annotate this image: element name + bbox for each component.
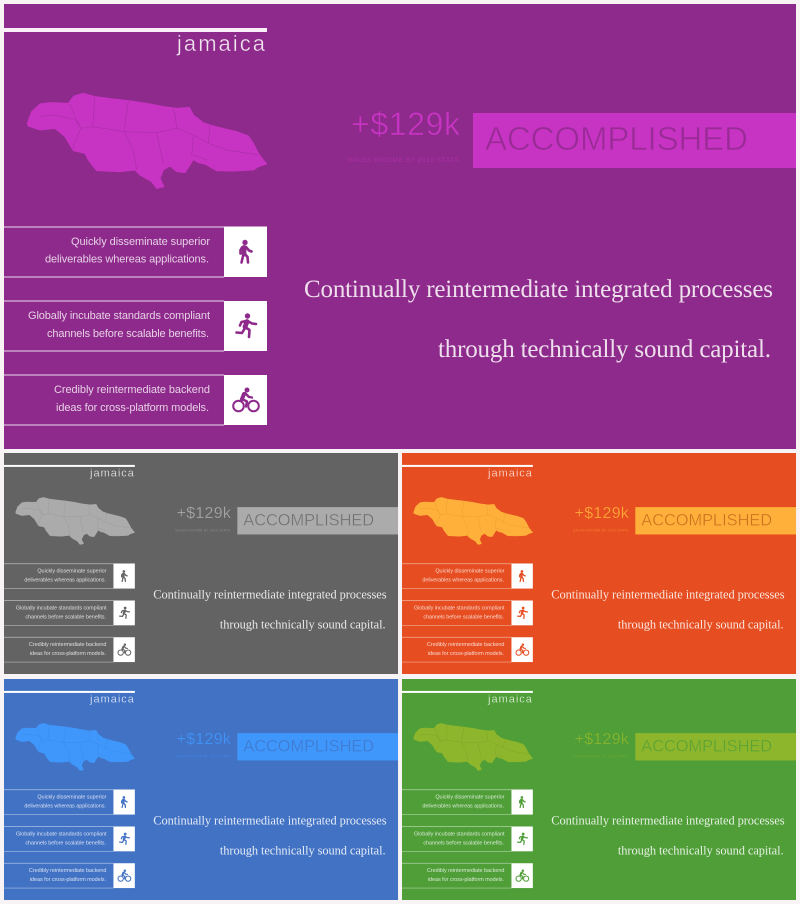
banner: accomplished: ACCOMPLISHED bbox=[641, 512, 772, 529]
row: running bbox=[4, 826, 135, 851]
stat: income: +$129k bbox=[575, 731, 629, 748]
statement text: Continually reintermediate integrated processes bbox=[551, 588, 785, 602]
row: cycling: Credibly reintermediate backend bbox=[29, 642, 106, 648]
map of Jamaica bbox=[16, 723, 135, 771]
row: walking: deliverables whereas applications. bbox=[422, 803, 504, 809]
map of Jamaica bbox=[27, 93, 267, 188]
stat: income: +$129k bbox=[351, 106, 461, 142]
stat: income: SALES INCOME BY 2012 STATS bbox=[573, 754, 628, 758]
heading: jamaica: jamaica bbox=[176, 31, 266, 56]
banner: accomplished: ACCOMPLISHED bbox=[243, 512, 374, 529]
row: running: Globally incubate standards compliant bbox=[414, 831, 505, 837]
row: running: Globally incubate standards compliant bbox=[16, 831, 107, 837]
row: walking: deliverables whereas applications. bbox=[422, 577, 504, 583]
statement text: Continually reintermediate integrated processes bbox=[153, 588, 387, 602]
banner: accomplished bbox=[237, 507, 398, 534]
statement text: through technically sound capital. bbox=[220, 843, 386, 857]
row: running bbox=[402, 826, 533, 851]
row: cycling bbox=[4, 375, 267, 425]
statement text: Continually reintermediate integrated processes bbox=[551, 814, 785, 828]
statement text bbox=[304, 276, 773, 363]
row: running: channels before scalable benefits. bbox=[423, 614, 504, 620]
statement text: through technically sound capital. bbox=[618, 843, 784, 857]
row: walking: Quickly disseminate superior bbox=[435, 569, 505, 575]
map of Jamaica bbox=[414, 497, 533, 545]
row: cycling: Credibly reintermediate backend bbox=[427, 642, 504, 648]
row: cycling: Credibly reintermediate backend bbox=[427, 868, 504, 874]
stat: income: +$129k bbox=[177, 505, 231, 522]
row: running: channels before scalable benefits. bbox=[423, 840, 504, 846]
stat: income: SALES INCOME BY 2012 STATS bbox=[573, 528, 628, 532]
header bar bbox=[402, 465, 533, 467]
row: running: channels before scalable benefits. bbox=[25, 614, 106, 620]
row: cycling: ideas for cross-platform models. bbox=[56, 402, 209, 414]
panel: gray variant bbox=[4, 453, 398, 674]
stat: income bbox=[175, 505, 231, 532]
row: walking bbox=[402, 789, 533, 815]
row: walking bbox=[402, 563, 533, 589]
header bar bbox=[4, 691, 135, 693]
row: cycling bbox=[402, 637, 533, 662]
banner: accomplished: ACCOMPLISHED bbox=[243, 738, 374, 755]
row: walking bbox=[4, 789, 135, 815]
heading: jamaica: jamaica bbox=[89, 693, 135, 705]
statement text: through technically sound capital. bbox=[618, 617, 784, 631]
stat: income: +$129k bbox=[575, 505, 629, 522]
map of Jamaica bbox=[16, 497, 135, 545]
panel: green variant bbox=[402, 679, 796, 900]
row: running: channels before scalable benefits. bbox=[25, 840, 106, 846]
row: walking: deliverables whereas applications. bbox=[24, 577, 106, 583]
heading: jamaica: jamaica bbox=[487, 693, 533, 705]
stat: income: SALES INCOME BY 2012 STATS bbox=[348, 157, 460, 164]
statement text: Continually reintermediate integrated processes bbox=[153, 814, 387, 828]
row: walking: Quickly disseminate superior bbox=[71, 236, 210, 248]
row: walking bbox=[4, 226, 267, 277]
panel background bbox=[402, 679, 796, 900]
heading: jamaica: jamaica bbox=[89, 467, 135, 479]
stat: income: SALES INCOME BY 2012 STATS bbox=[175, 528, 230, 532]
row: cycling: ideas for cross-platform models. bbox=[428, 651, 504, 657]
row: running: channels before scalable benefits. bbox=[47, 328, 209, 340]
stat: income bbox=[573, 731, 629, 758]
statement text: through technically sound capital. bbox=[220, 617, 386, 631]
row: running bbox=[4, 600, 135, 625]
banner: accomplished bbox=[635, 733, 796, 760]
stat: income: SALES INCOME BY 2012 STATS bbox=[175, 754, 230, 758]
banner: accomplished bbox=[237, 733, 398, 760]
stat: income: +$129k bbox=[177, 731, 231, 748]
stat: income bbox=[573, 505, 629, 532]
statement text bbox=[153, 814, 387, 857]
heading: jamaica: jamaica bbox=[487, 467, 533, 479]
panel: blue variant bbox=[4, 679, 398, 900]
row: running: Globally incubate standards compliant bbox=[414, 605, 505, 611]
banner: accomplished bbox=[473, 113, 796, 168]
row: cycling bbox=[4, 637, 135, 662]
panel background bbox=[4, 4, 796, 449]
header bar bbox=[4, 28, 267, 32]
row: cycling bbox=[4, 863, 135, 888]
panel: orange variant bbox=[402, 453, 796, 674]
row: walking bbox=[4, 563, 135, 589]
panel background bbox=[4, 453, 398, 674]
banner: accomplished bbox=[635, 507, 796, 534]
row: cycling: Credibly reintermediate backend bbox=[29, 868, 106, 874]
statement text: Continually reintermediate integrated processes bbox=[304, 276, 773, 303]
row: cycling: ideas for cross-platform models. bbox=[30, 651, 106, 657]
row: walking: Quickly disseminate superior bbox=[37, 795, 107, 801]
row: cycling: ideas for cross-platform models. bbox=[428, 877, 504, 883]
statement text bbox=[551, 588, 785, 631]
panel background bbox=[402, 453, 796, 674]
row: walking: deliverables whereas applications. bbox=[24, 803, 106, 809]
row: walking: Quickly disseminate superior bbox=[435, 795, 505, 801]
row: walking: deliverables whereas applications. bbox=[45, 254, 209, 266]
panel: purple main bbox=[4, 4, 796, 449]
row: running bbox=[4, 301, 267, 351]
row: cycling: ideas for cross-platform models. bbox=[30, 877, 106, 883]
row: cycling bbox=[402, 863, 533, 888]
row: walking: Quickly disseminate superior bbox=[37, 569, 107, 575]
map of Jamaica bbox=[414, 723, 533, 771]
row: cycling: Credibly reintermediate backend bbox=[54, 384, 210, 396]
stat: income bbox=[348, 106, 461, 164]
statement text: through technically sound capital. bbox=[438, 336, 771, 363]
header bar bbox=[4, 465, 135, 467]
panel background bbox=[4, 679, 398, 900]
statement text bbox=[551, 814, 785, 857]
banner: accomplished: ACCOMPLISHED bbox=[641, 738, 772, 755]
header bar bbox=[402, 691, 533, 693]
stat: income bbox=[175, 731, 231, 758]
statement text bbox=[153, 588, 387, 631]
banner: accomplished: ACCOMPLISHED bbox=[485, 120, 748, 157]
row: running: Globally incubate standards compliant bbox=[16, 605, 107, 611]
row: running: Globally incubate standards compliant bbox=[28, 310, 210, 322]
row: running bbox=[402, 600, 533, 625]
